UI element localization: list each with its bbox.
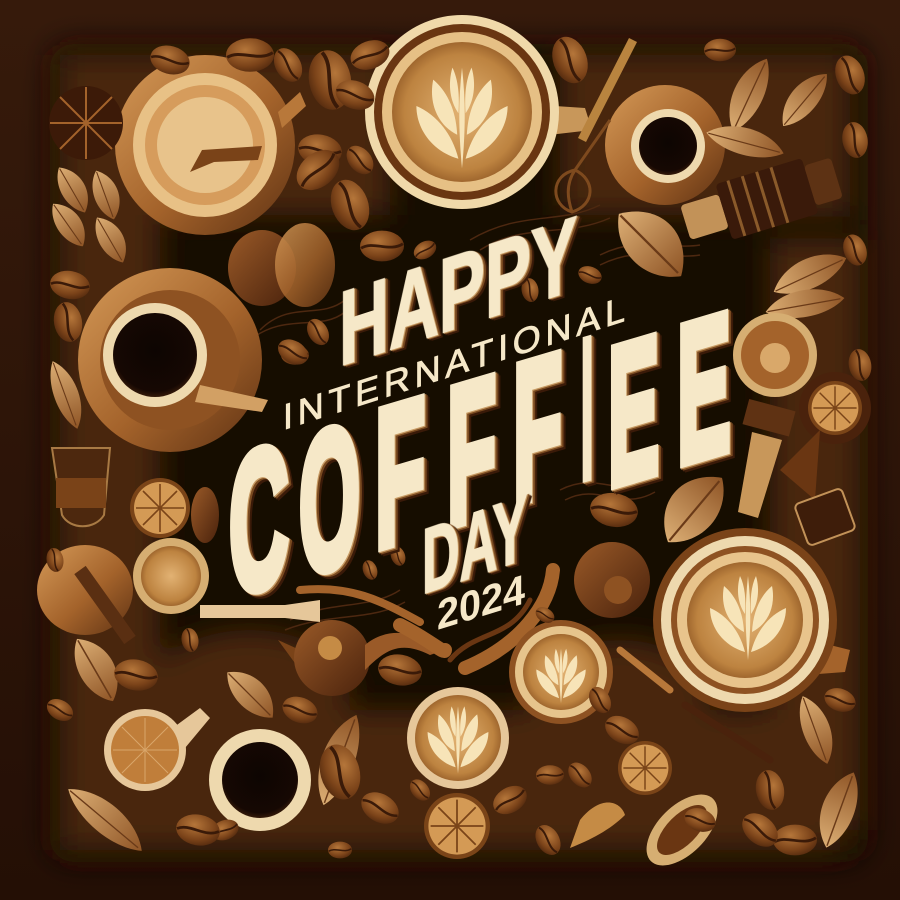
heading: HAPPY: HAPPY <box>339 193 577 388</box>
latte cups: bottom centre <box>407 620 613 789</box>
latte cup: large lower right <box>653 528 850 712</box>
heading: COFFEE word: C <box>229 402 288 639</box>
heading: DAY: DAY <box>422 475 527 614</box>
espresso cup: bottom left <box>209 729 311 831</box>
heading: COFFEE word: E <box>608 294 659 528</box>
teapot <box>278 620 445 696</box>
citrus slices and plates: left <box>37 478 219 640</box>
year: 2024: 2024 <box>437 566 525 640</box>
leaves: left column <box>43 161 135 433</box>
glass jug <box>52 448 110 526</box>
coffee cup with saucer: left <box>78 268 268 452</box>
contour lines around the title <box>250 205 700 630</box>
heading: COFFEE word: E <box>677 271 731 506</box>
subheading: INTERNATIONAL: INTERNATIONAL <box>283 289 625 438</box>
round wood ball <box>574 542 650 618</box>
heading: COFFEE word: F <box>375 357 425 591</box>
leaves: right <box>763 243 852 324</box>
french press <box>677 150 845 251</box>
bottom right ornaments <box>424 691 867 878</box>
dried citrus slice: top left <box>49 86 123 160</box>
leaf beside title <box>647 460 739 556</box>
whisk and tool <box>556 40 633 212</box>
brown base shapes behind the illustrations <box>60 55 860 850</box>
citrus plates: right <box>733 313 871 444</box>
title text <box>229 193 731 640</box>
heading: COFFEE word: F <box>447 335 496 568</box>
heading: COFFEE word <box>229 271 731 639</box>
leaves: top right <box>603 52 836 292</box>
tube and bottle: right <box>738 399 856 546</box>
pen and sticks: lower right <box>620 650 770 760</box>
heading: COFFEE word: F <box>513 312 562 545</box>
latte cup: top centre <box>365 15 592 209</box>
heading: COFFEE word: I <box>581 298 593 521</box>
swirl under title <box>300 570 553 668</box>
leaves: bottom left <box>60 629 370 861</box>
spoon <box>200 600 320 622</box>
mug: bottom left <box>104 708 210 791</box>
wood shapes beside title <box>228 223 335 307</box>
cup with saucer: top left <box>115 55 306 235</box>
heading: COFFEE word: O <box>299 380 360 618</box>
espresso cup: top right <box>605 85 725 205</box>
